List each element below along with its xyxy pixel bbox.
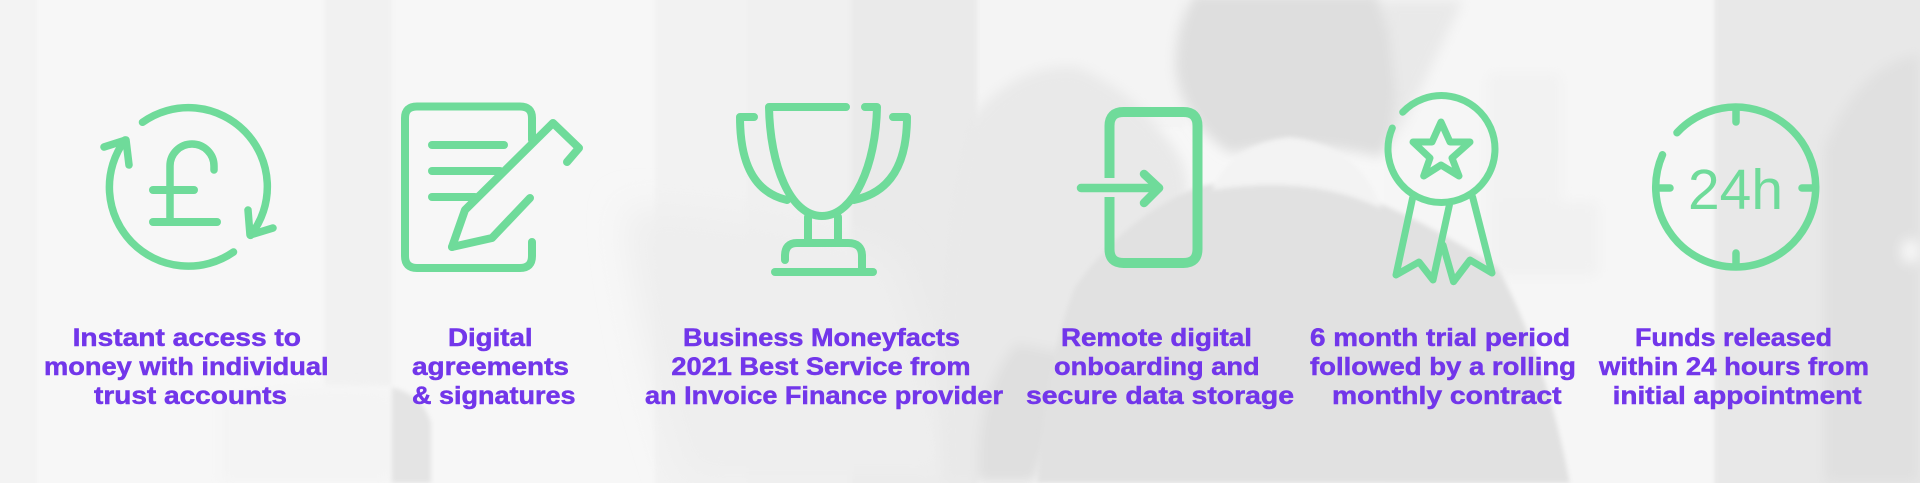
- text: award: an Invoice Finance provider: [645, 382, 1003, 410]
- icon: phone with entry arrow: [1081, 112, 1198, 263]
- panel: trial period: [1310, 96, 1576, 410]
- panel: digital agreements: [405, 106, 579, 410]
- text: award: [645, 324, 1003, 410]
- text: instant access: trust accounts: [94, 382, 287, 410]
- icon: rosette with star: [1388, 96, 1495, 282]
- text: digital agreements: Digital: [448, 324, 533, 352]
- icon: 24 hour clock: 24h: [1688, 158, 1783, 222]
- text: instant access: [44, 324, 329, 410]
- text: instant access: Instant access to: [73, 324, 301, 352]
- text: digital agreements: agreements: [412, 353, 569, 381]
- icon: document and pen: [405, 106, 579, 268]
- text: trial period: followed by a rolling: [1310, 353, 1576, 381]
- text: trial period: 6 month trial period: [1310, 324, 1570, 352]
- text: funds released: [1598, 324, 1869, 410]
- icon: trophy: [740, 107, 907, 272]
- panel: award: [645, 107, 1003, 410]
- text: instant access: money with individual: [44, 353, 329, 381]
- icon: pound with circular arrows: [104, 108, 273, 266]
- text: trial period: monthly contract: [1332, 382, 1562, 410]
- text: digital agreements: [412, 324, 576, 410]
- panel: remote onboarding: [1026, 112, 1294, 410]
- text: funds released: Funds released: [1635, 324, 1832, 352]
- text: funds released: initial appointment: [1613, 382, 1862, 410]
- icon: 24 hour clock: [1656, 107, 1816, 267]
- text: remote onboarding: secure data storage: [1026, 382, 1294, 410]
- text: digital agreements: & signatures: [412, 382, 576, 410]
- text: award: Business Moneyfacts: [683, 324, 960, 352]
- text: remote onboarding: Remote digital: [1061, 324, 1252, 352]
- text: award: 2021 Best Service from: [671, 353, 971, 381]
- text: remote onboarding: onboarding and: [1054, 353, 1260, 381]
- text: trial period: [1310, 324, 1576, 410]
- panel: funds released: [1598, 107, 1869, 410]
- text: funds released: within 24 hours from: [1598, 353, 1869, 381]
- panel: instant access: [44, 108, 329, 410]
- text: remote onboarding: [1026, 324, 1294, 410]
